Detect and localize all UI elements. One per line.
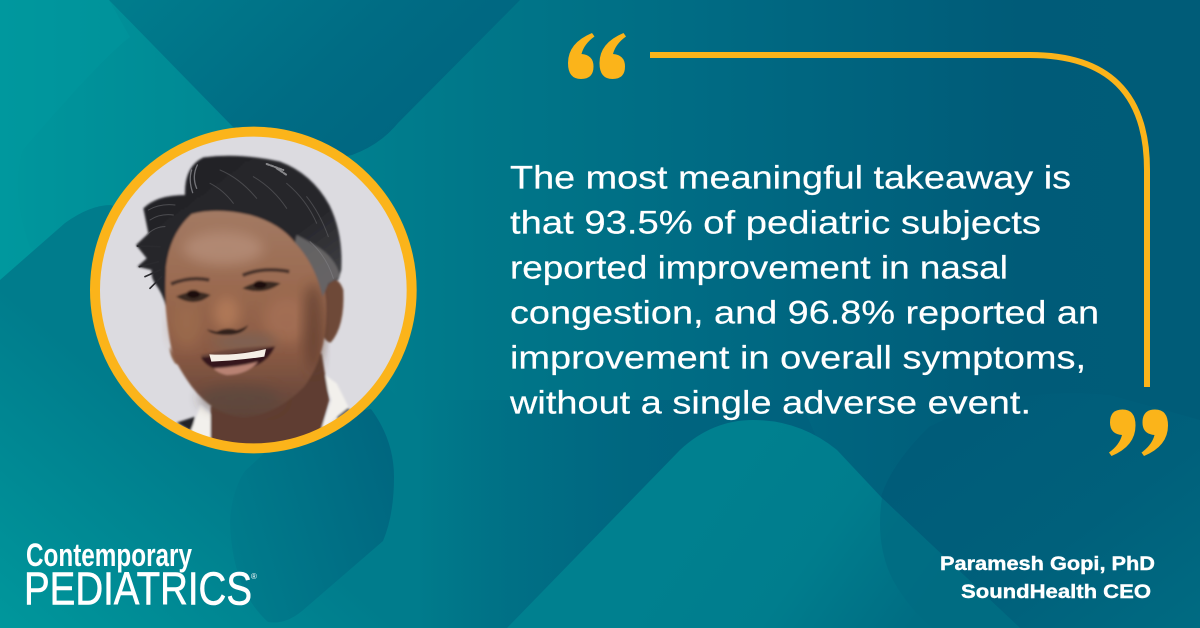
photo backdrop [95,132,412,448]
quote frame line [650,55,1147,387]
quote text: without a single adverse event. [509,384,1031,420]
quote text: congestion, and 96.8% reported an [510,294,1099,330]
portrait photo [95,132,412,450]
quote text: that 93.5% of pediatric subjects [510,204,1041,240]
opening quotation mark [568,33,626,79]
attribution: SoundHealth CEO [961,581,1151,603]
logo: Contemporary Pediatrics: PEDIATRICS [24,562,252,614]
photo ring [95,132,412,448]
teeth [209,349,266,362]
logo: Contemporary Pediatrics: Contemporary [26,537,192,573]
attribution [940,553,1155,603]
attribution: Paramesh Gopi, PhD [940,553,1155,575]
hair strands [137,164,333,288]
quote text: reported improvement in nasal [510,250,1008,286]
quote text [509,160,1099,420]
logo: Contemporary Pediatrics [24,537,257,614]
quote text: improvement in overall symptoms, [510,340,1086,376]
closing quotation mark [1109,410,1168,456]
quote text: The most meaningful takeaway is [510,160,1071,196]
portrait figure [136,156,350,450]
logo: Contemporary Pediatrics: ® [251,572,257,581]
